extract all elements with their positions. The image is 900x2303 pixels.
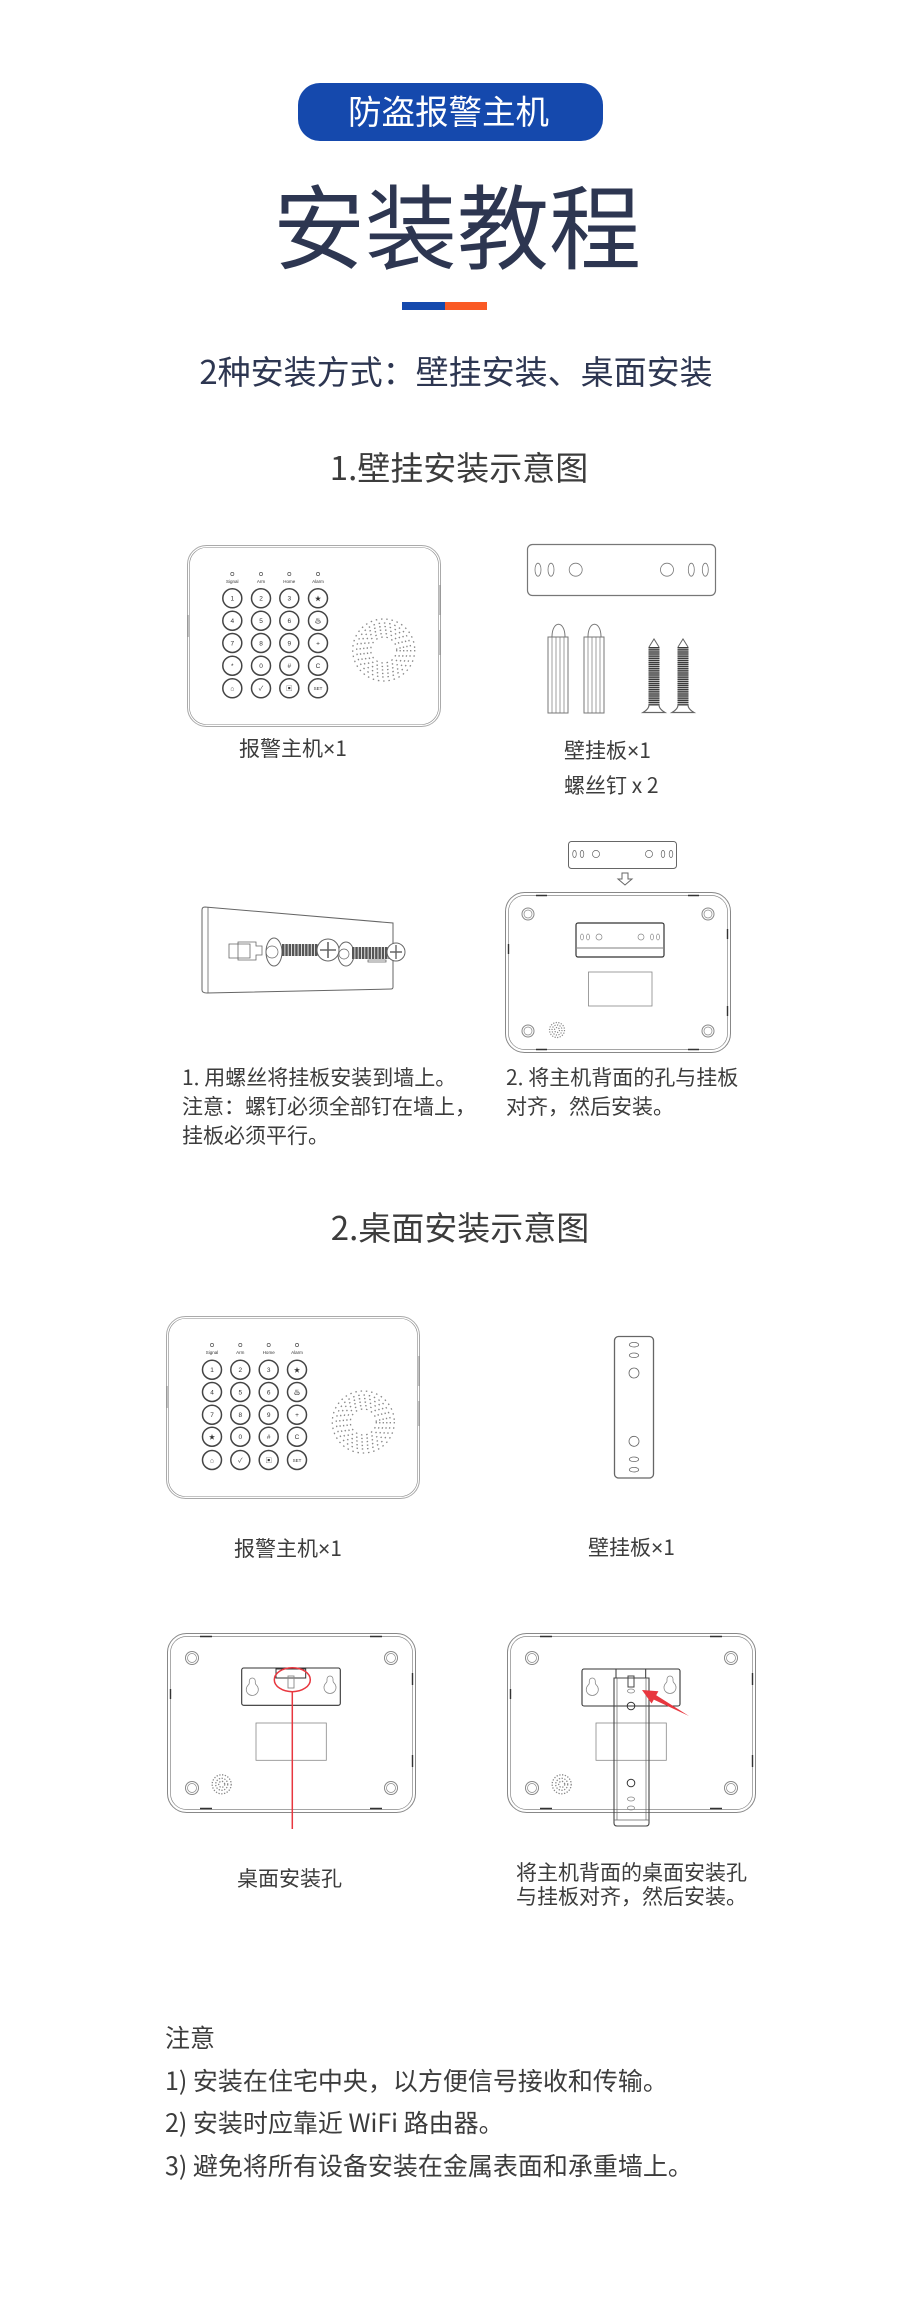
screws <box>643 639 694 712</box>
label: plate and screws: 螺丝钉 x 2 <box>564 770 659 800</box>
device front view B: 4 <box>210 1389 214 1396</box>
device front view B: + <box>295 1412 299 1419</box>
notes block <box>165 2019 693 2183</box>
notes block: 2) 安装时应靠近 WiFi 路由器。 <box>165 2104 504 2140</box>
device front view B: 7 <box>210 1412 214 1419</box>
device front view B: # <box>267 1434 271 1441</box>
device front view A: 7 <box>230 640 234 647</box>
device front view B: 6 <box>267 1389 271 1396</box>
device front view B <box>166 1316 420 1498</box>
device front view B: C <box>295 1434 300 1441</box>
device front view B: ⌂ <box>210 1457 214 1464</box>
device front view A <box>188 546 440 726</box>
wall plate <box>528 544 716 596</box>
title: 安装教程 <box>273 156 641 289</box>
label: plate and screws <box>564 735 659 800</box>
small wall plate <box>568 842 676 868</box>
device front view A: 8 <box>259 640 263 647</box>
device front view A: # <box>287 663 291 670</box>
device back with bracket <box>508 1634 756 1826</box>
notes block: 注意 <box>165 2019 215 2055</box>
device front view A: 6 <box>287 618 291 625</box>
device back: desktop mounting hole <box>168 1634 416 1812</box>
device front view B: ★ <box>209 1434 216 1441</box>
device front view B: 3 <box>267 1367 271 1374</box>
step 1 text <box>182 1062 476 1150</box>
label: device x1 desktop: 报警主机×1 <box>234 1533 342 1563</box>
subtitle: two install methods: 2种安装方式：壁挂安装、桌面安装 <box>199 346 713 394</box>
badge: product name: 防盗报警主机 <box>348 85 549 134</box>
device front view A: 0 <box>259 663 263 670</box>
device front view B: ✓ <box>238 1456 243 1464</box>
device front view A: ▣ <box>286 685 293 693</box>
callout: red ellipse and leader line <box>274 1668 310 1829</box>
device front view A: ⌂ <box>230 686 234 693</box>
heading: desktop mount: 2.桌面安装示意图 <box>331 1202 589 1250</box>
device front view A: ♨ <box>315 617 321 625</box>
device front view B: 1 <box>210 1367 214 1374</box>
device front view B: Signal <box>206 1350 218 1355</box>
arrow: plate down to device <box>618 873 632 885</box>
desktop step text <box>516 1857 747 1911</box>
device front view A: Home <box>283 579 296 584</box>
device front view B: ♨ <box>294 1388 300 1396</box>
notes block: 3) 避免将所有设备安装在金属表面和承重墙上。 <box>165 2147 693 2183</box>
device front view A: SET <box>314 686 323 691</box>
desktop step text: 与挂板对齐，然后安装。 <box>516 1881 747 1911</box>
label: device x1: 报警主机×1 <box>239 733 347 763</box>
device front view B: 5 <box>238 1389 242 1396</box>
wall plate installation drawing <box>202 907 405 993</box>
badge: product name <box>298 83 603 141</box>
device front view A: 4 <box>230 618 234 625</box>
wall plugs <box>548 624 604 713</box>
device front view A: 3 <box>287 596 291 603</box>
label: plate x1 desktop: 壁挂板×1 <box>588 1532 675 1562</box>
device front view A: C <box>316 663 321 670</box>
device front view B: ★ <box>294 1367 301 1374</box>
device front view A: 5 <box>259 618 263 625</box>
desktop step text: 将主机背面的桌面安装孔 <box>516 1857 747 1887</box>
device front view B: Home <box>263 1350 275 1355</box>
device front view B: 8 <box>238 1412 242 1419</box>
device front view A: ✓ <box>259 685 264 693</box>
heading: wall mount: 1.壁挂安装示意图 <box>330 442 588 490</box>
device front view B: 2 <box>238 1367 242 1374</box>
step 1 text: 注意：螺钉必须全部钉在墙上， <box>182 1091 476 1121</box>
step 2 text <box>506 1062 738 1121</box>
device front view A: * <box>231 663 234 670</box>
device front view B: ▣ <box>265 1456 272 1464</box>
device front view A: 2 <box>259 596 263 603</box>
device front view B: 0 <box>238 1434 242 1441</box>
device front view A: ★ <box>315 596 322 603</box>
device front view A: Arm <box>257 579 265 584</box>
device back with plate on it <box>506 892 730 1052</box>
step 2 text: 对齐，然后安装。 <box>506 1091 674 1121</box>
device front view A: + <box>316 640 320 647</box>
step 1 text: 1. 用螺丝将挂板安装到墙上。 <box>182 1062 456 1092</box>
step 2 text: 2. 将主机背面的孔与挂板 <box>506 1062 738 1092</box>
notes block: 1) 安装在住宅中央，以方便信号接收和传输。 <box>165 2062 668 2098</box>
vertical wall plate <box>614 1336 654 1478</box>
device front view A: 9 <box>287 640 291 647</box>
device front view B: Alarm <box>291 1350 303 1355</box>
device front view A: Alarm <box>312 579 324 584</box>
device front view B: 9 <box>267 1412 271 1419</box>
device front view A: Signal <box>226 579 239 584</box>
label: desktop hole: 桌面安装孔 <box>237 1863 342 1893</box>
device front view A: 1 <box>230 596 234 603</box>
step 1 text: 挂板必须平行。 <box>182 1120 329 1150</box>
device front view B: Arm <box>236 1350 245 1355</box>
device front view B: SET <box>293 1458 302 1463</box>
arrow: red pointer <box>642 1690 689 1716</box>
label: plate and screws: 壁挂板×1 <box>564 735 651 765</box>
accent bar <box>402 302 487 310</box>
